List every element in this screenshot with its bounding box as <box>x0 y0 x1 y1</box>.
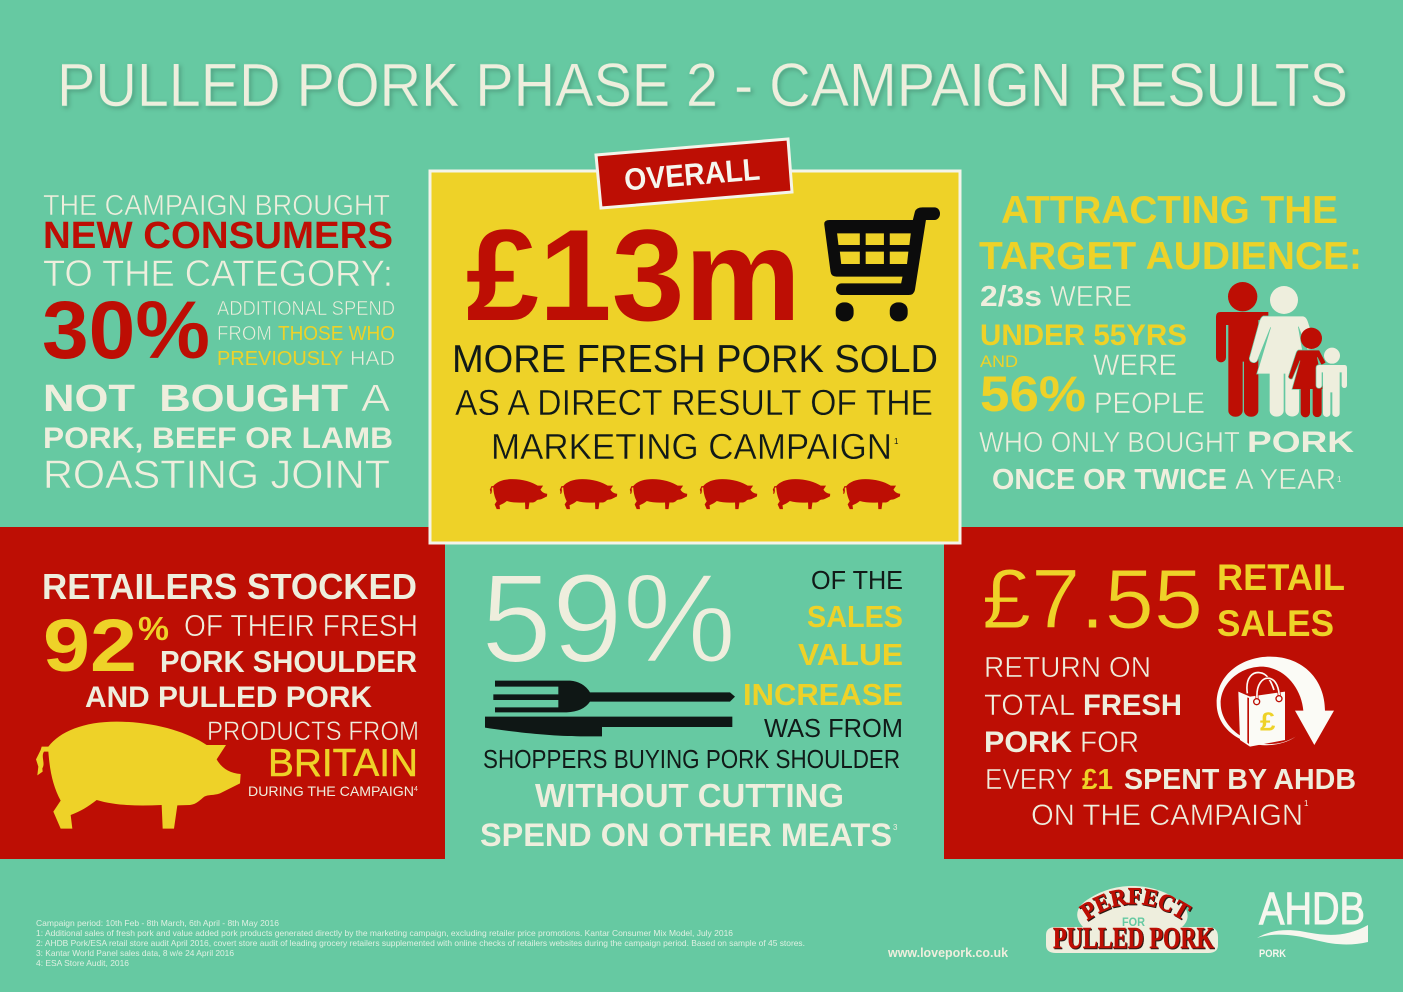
text: to the category: TO THE CATEGORY: <box>43 253 393 294</box>
stat: 7.55 pounds: £7.55 <box>982 552 1203 646</box>
text: without cutting: WITHOUT CUTTING <box>535 777 844 814</box>
text: during the campaign: DURING THE CAMPAIGN <box>248 783 414 799</box>
text: every: EVERY <box>985 764 1073 796</box>
footnotes <box>36 919 805 968</box>
footnotes: 3: Kantar World Panel sales data, 8 w/e 24 April 2016 <box>36 949 234 958</box>
footnote mark 3: 3 <box>893 823 898 832</box>
text: once or twice: ONCE OR TWICE <box>992 464 1227 496</box>
panel: retailers red background <box>0 527 445 859</box>
footnotes: 1: Additional sales of fresh pork and value added pork products generated directly by the marketing campaign, excluding retailer price promotions. Kantar Consumer Mix Model, July 2016 <box>36 929 733 938</box>
website url: www.lovepork.co.uk <box>887 946 1008 960</box>
logo: perfect for pulled pork: PULLED PORK <box>1053 920 1214 955</box>
text: spend on other meats: SPEND ON OTHER MEATS <box>480 817 892 853</box>
text: a: A <box>361 378 391 420</box>
yellow box <box>430 171 960 543</box>
stat: 59 percent: 59% <box>481 548 736 689</box>
text: value: VALUE <box>798 637 903 672</box>
heading: retailers stocked: RETAILERS STOCKED <box>42 566 417 607</box>
badge: overall: OVERALL <box>623 151 761 198</box>
panel: 59 percent <box>480 548 903 853</box>
text: as a direct result of the: AS A DIRECT RESULT OF THE <box>455 382 933 423</box>
logo: perfect for pulled pork: FOR <box>1122 915 1145 929</box>
stat: 30 percent: 30% <box>42 285 210 376</box>
panel: retailers stocked <box>36 566 419 829</box>
icon: knife and fork <box>485 681 735 736</box>
title: PULLED PORK PHASE 2 - CAMPAIGN RESULTS <box>57 51 1348 119</box>
panel: overall yellow box <box>430 139 960 543</box>
icons: row of six pigs <box>490 479 900 509</box>
text: were: WERE <box>1050 281 1132 313</box>
text: of the: OF THE <box>811 565 903 595</box>
stat: two thirds: 2/3s <box>980 281 1042 313</box>
text: fresh: FRESH <box>1083 689 1182 722</box>
text: pork, beef or lamb: PORK, BEEF OR LAMB <box>43 422 393 455</box>
logo: perfect for pulled pork <box>1046 886 1218 955</box>
footnote mark 1: 1 <box>1304 799 1309 808</box>
text: products from: PRODUCTS FROM <box>207 716 419 746</box>
text: under 55yrs: UNDER 55YRS <box>980 319 1187 352</box>
text: pork shoulder: PORK SHOULDER <box>160 644 417 679</box>
text: increase: INCREASE <box>743 677 903 712</box>
text: sales: SALES <box>807 599 903 634</box>
text: britain: BRITAIN <box>268 742 418 785</box>
stat: 13 million pounds: £13m <box>466 202 801 348</box>
text: those who: THOSE WHO <box>278 323 395 345</box>
text: one pound: £1 <box>1082 764 1113 796</box>
stat: 56 percent: 56% <box>980 366 1086 422</box>
text: pork: PORK <box>984 726 1072 759</box>
text: not bought: NOT BOUGHT <box>43 378 348 420</box>
panel: retail sales return <box>982 552 1356 832</box>
footnote mark 4: 4 <box>414 786 418 793</box>
text: the campaign brought: THE CAMPAIGN BROUGHT <box>43 190 390 222</box>
text: and pulled pork: AND PULLED PORK <box>85 681 372 714</box>
logo: ahdb pork <box>1257 883 1368 960</box>
text: and: AND <box>980 352 1018 371</box>
text: previously: PREVIOUSLY <box>217 348 343 370</box>
stat: 92: 92 <box>43 604 137 687</box>
text: shoppers buying pork shoulder: SHOPPERS BUYING PORK SHOULDER <box>483 744 900 774</box>
stat: percent sign: % <box>138 610 169 647</box>
text: marketing campaign: MARKETING CAMPAIGN <box>491 426 892 467</box>
text: new consumers: NEW CONSUMERS <box>43 215 393 257</box>
text: was from: WAS FROM <box>764 713 903 743</box>
logo: perfect for pulled pork: PERFECT <box>1078 888 1193 922</box>
icon: shopping cart <box>824 207 940 321</box>
text: on the campaign: ON THE CAMPAIGN <box>1031 799 1303 832</box>
footnotes: 2: AHDB Pork/ESA retail store audit April 2016, covert store audit of leading grocery retailers supplemented with online checks of retailers websites during the campaign period. Based on sample of 45 stores. <box>36 939 805 948</box>
footnotes: Campaign period: 10th Feb - 8th March, 6th April - 8th May 2016 <box>36 919 279 928</box>
text: sales: SALES <box>1217 603 1334 644</box>
text: roasting joint: ROASTING JOINT <box>43 453 390 497</box>
logo: ahdb pork: AHDB <box>1259 883 1365 934</box>
icon: family <box>1216 282 1347 418</box>
text: retail: RETAIL <box>1217 557 1345 598</box>
badge: overall <box>596 139 792 208</box>
panel: target audience <box>979 189 1362 496</box>
footnotes: 4: ESA Store Audit, 2016 <box>36 959 129 968</box>
footnote mark 1: 1 <box>894 437 899 446</box>
text: from: FROM <box>217 323 272 345</box>
text: pork: PORK <box>1247 426 1354 459</box>
icon: yellow pig <box>36 722 241 829</box>
text: of their fresh: OF THEIR FRESH <box>184 608 418 643</box>
text: return on: RETURN ON <box>984 652 1151 684</box>
heading: target audience: TARGET AUDIENCE: <box>979 235 1362 278</box>
logo: ahdb pork: PORK <box>1259 948 1286 960</box>
panel: retail sales red background <box>944 527 1403 859</box>
text: people: PEOPLE <box>1094 387 1205 420</box>
text: for: FOR <box>1080 726 1139 759</box>
panel: new consumers <box>42 190 395 497</box>
text: who only bought: WHO ONLY BOUGHT <box>979 427 1240 459</box>
text: spent by ahdb: SPENT BY AHDB <box>1124 764 1356 796</box>
text: more fresh pork sold: MORE FRESH PORK SOLD <box>452 338 938 381</box>
text: total: TOTAL <box>984 689 1075 722</box>
text: were: WERE <box>1093 349 1177 382</box>
heading: attracting the: ATTRACTING THE <box>1001 189 1338 232</box>
text: additional spend: ADDITIONAL SPEND <box>217 298 395 320</box>
text: had: HAD <box>350 348 395 370</box>
footnote mark 1: 1 <box>1337 475 1342 484</box>
text: a year: A YEAR <box>1235 464 1336 496</box>
icon: shopping bag with arrow <box>1217 657 1334 747</box>
icon: shopping bag with arrow: £ <box>1260 707 1276 737</box>
